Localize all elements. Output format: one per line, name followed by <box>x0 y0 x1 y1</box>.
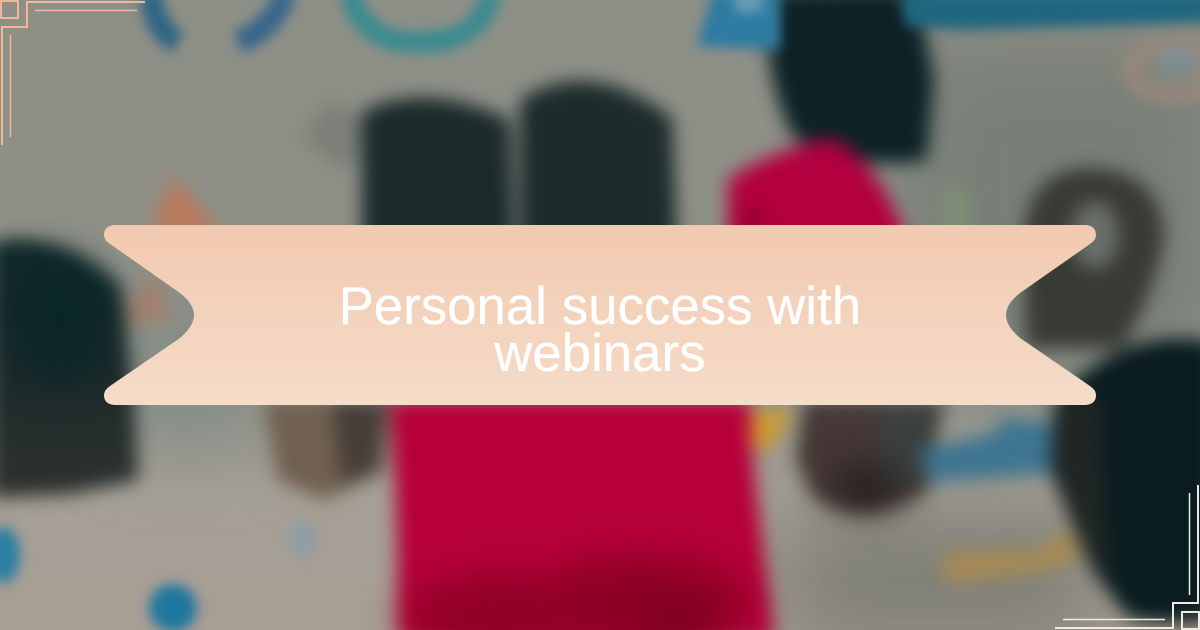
title <box>339 277 861 383</box>
top-left corner ornament <box>0 0 145 145</box>
bottom-right corner ornament <box>1055 485 1200 630</box>
title: webinars <box>494 324 706 383</box>
title: Personal success with <box>339 277 861 336</box>
